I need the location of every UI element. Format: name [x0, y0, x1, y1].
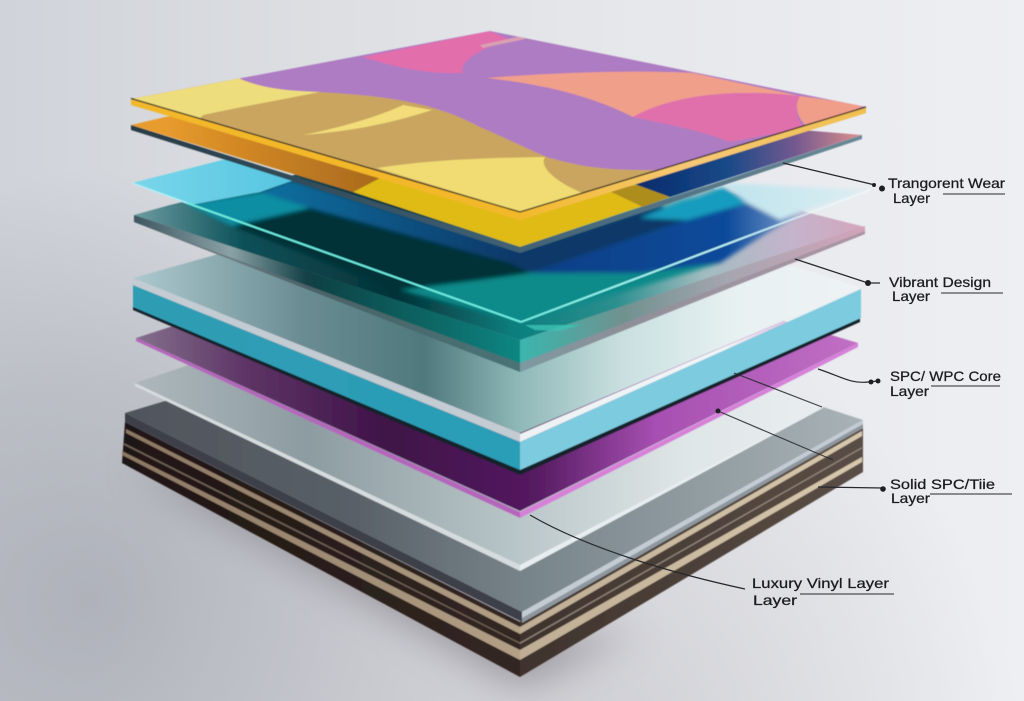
label: SPC/WPC Core Layer: SPC/ WPC Core [890, 368, 1001, 384]
layer: purple sheet [136, 230, 858, 518]
layer: top wear sheet with colour art [131, 31, 866, 220]
layer: teal-gray slab [134, 130, 865, 372]
label: SPC/WPC Core Layer: Layer [890, 383, 929, 399]
layer: cyan core slab [133, 170, 861, 475]
label: Transparent Wear Layer: Trangorent Wear [888, 175, 1005, 191]
layer: transparent glass sheet [132, 158, 870, 322]
label: Luxury Vinyl Layer [752, 575, 894, 608]
label: Luxury Vinyl Layer: Luxury Vinyl Layer [752, 575, 889, 591]
label: SPC/WPC Core Layer [890, 368, 1001, 399]
label: Solid SPC/Tile Layer [890, 476, 1012, 506]
label: Solid SPC/Tile Layer: Solid SPC/Tiie [890, 476, 995, 492]
label: Vibrant Design Layer: Layer [892, 288, 930, 304]
floor shadow [130, 465, 640, 685]
layer: light gray sheet [135, 250, 823, 571]
layer: gray slab [125, 340, 863, 623]
layer: design sheet [131, 90, 862, 253]
label: Vibrant Design Layer: Vibrant Design [889, 274, 991, 290]
label: Luxury Vinyl Layer: Layer [753, 592, 797, 608]
label: Transparent Wear Layer [888, 175, 1005, 206]
label: Solid SPC/Tile Layer: Layer [891, 490, 930, 506]
label: Transparent Wear Layer: Layer [893, 190, 930, 206]
label: Vibrant Design Layer [889, 274, 1003, 304]
layer: bottom stacked base [122, 422, 863, 677]
leader lines and dots [530, 163, 886, 589]
